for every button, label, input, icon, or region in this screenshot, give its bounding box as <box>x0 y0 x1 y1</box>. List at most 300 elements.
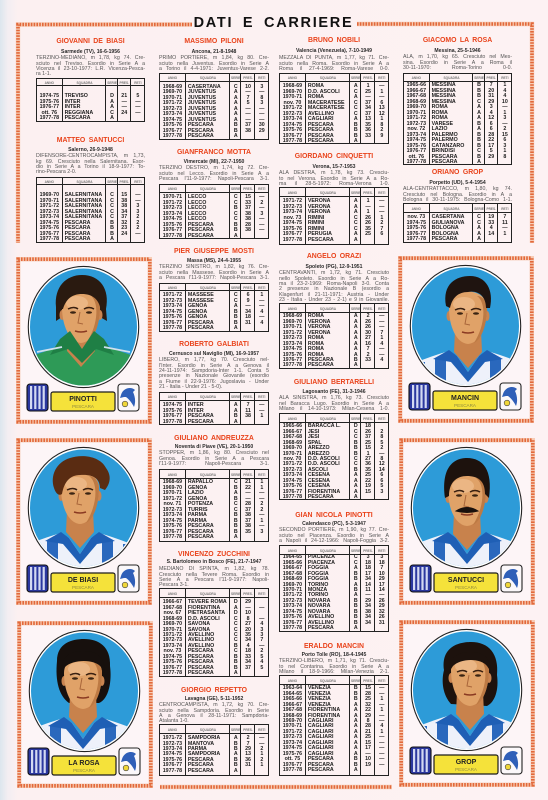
player: Eraldo Mancin: A <box>354 745 358 751</box>
player: Angelo Orazi: A <box>354 330 358 336</box>
player: Giorgio Repetto: Atalanta 1-0. <box>159 718 189 724</box>
player: Angelo Orazi: 7 <box>380 330 383 336</box>
player: Massimo Piloni: — <box>259 89 264 95</box>
team stripes <box>27 384 48 411</box>
player: Vincenzo Zucchini: 33 <box>245 654 251 660</box>
player: Giuliano Andreuzza: l'11-9-1977: Napoli-Pescara 3-1. <box>159 461 269 467</box>
player: Bruno Nobili: PESCARA <box>308 127 334 133</box>
player: Massimo Piloni: A <box>234 95 238 101</box>
player: Gian Nicola Pinotti: NOVARA <box>308 603 330 609</box>
player: Giovanni De Biasi: SQUADRA <box>76 81 93 85</box>
player: Oriano Grop: RETI <box>501 207 508 211</box>
player: Giorgio Repetto: B <box>234 741 238 747</box>
name plate <box>51 392 115 411</box>
player: Vincenzo Zucchini: 5 <box>260 654 263 660</box>
player: Giorgio Repetto: 2 <box>247 735 250 741</box>
player: Pier Giuseppe Mosti: 34 <box>245 309 251 315</box>
player: Giuliano Andreuzza: GENOA <box>188 485 207 491</box>
player: Giacomo La Rosa: C <box>477 99 481 105</box>
player: Eraldo Mancin: ANNO <box>288 679 297 683</box>
player: Bruno Nobili: — <box>365 94 371 100</box>
player: Giordano Cinquetti: PERUGIA <box>308 231 332 237</box>
player: Pier Giuseppe Mosti: C <box>234 292 238 298</box>
player: Giordano Cinquetti: GIORDANO CINQUETTI <box>295 153 373 160</box>
player: Eraldo Mancin: RETI <box>378 679 385 683</box>
player: Giuliano Andreuzza: 3 <box>260 529 263 535</box>
player: Giuliano Bertarelli: SQUADRA <box>320 417 336 421</box>
player: Vincenzo Zucchini: C <box>234 648 238 654</box>
player: Gian Nicola Pinotti: 1968-69 <box>283 576 302 582</box>
player: Massimo Piloni: PESCARA <box>188 133 214 139</box>
player: Giuliano Andreuzza: 28 <box>245 501 251 507</box>
player: Gianfranco Motta: B <box>234 222 238 228</box>
player: Giuliano Andreuzza: PARMA <box>188 512 207 518</box>
name plate: PESCARA <box>72 585 95 590</box>
player: Giacomo La Rosa: 1973-74 <box>407 132 426 138</box>
player: Giacomo La Rosa: 3 <box>490 104 493 110</box>
player: Gian Nicola Pinotti: — <box>379 592 384 598</box>
player: Giordano Cinquetti: — <box>379 204 384 210</box>
player: Angelo Orazi: SQUADRA <box>320 307 336 311</box>
player: Giuliano Bertarelli: 15 <box>365 489 371 495</box>
player: Bruno Nobili: BRUNO NOBILI <box>308 37 360 44</box>
player: Angelo Orazi: 27 <box>365 335 371 341</box>
player: Giuliano Bertarelli: 8 <box>380 456 383 462</box>
player: Giuliano Bertarelli: B <box>354 445 358 451</box>
player: Giacomo La Rosa: RETI <box>501 76 508 80</box>
player: Bruno Nobili: D.D. ASCOLI <box>308 89 340 95</box>
player: Vincenzo Zucchini: — <box>259 605 264 611</box>
player: Matteo Santucci: 2 <box>136 214 139 220</box>
player: Bruno Nobili: — <box>379 83 384 89</box>
player: Roberto Galbiati: SERIE <box>231 395 241 399</box>
player: Eraldo Mancin: 1969-70 <box>283 718 302 724</box>
player: Angelo Orazi: 33 <box>365 357 371 363</box>
player: Eraldo Mancin: 1967-68 <box>283 707 302 713</box>
player: Matteo Santucci: PESCARA <box>65 220 91 226</box>
player: Bruno Nobili: A <box>354 94 358 100</box>
player: Vincenzo Zucchini: PESCARA <box>188 665 214 671</box>
player: Gian Nicola Pinotti: 29 <box>365 598 371 604</box>
player: Pier Giuseppe Mosti: 4 <box>260 309 263 315</box>
player: Eraldo Mancin: 1973-74 <box>283 740 302 746</box>
player: Giordano Cinquetti: 1977-78 <box>283 237 302 243</box>
player: Giovanni De Biasi: PRES. <box>119 81 129 85</box>
player: Matteo Santucci: Salerno, 26-9-1948 <box>68 147 113 153</box>
player: Eraldo Mancin: — <box>379 756 384 762</box>
player: Gian Nicola Pinotti: PIACENZA <box>308 554 335 560</box>
player: Roberto Galbiati: INTER <box>188 402 204 408</box>
player: Matteo Santucci: PRES. <box>119 180 129 184</box>
player: Giovanni De Biasi: RETI <box>134 81 142 85</box>
player: Giacomo La Rosa: ROMA <box>432 104 448 110</box>
player: Matteo Santucci: 3 <box>136 203 139 209</box>
player: Eraldo Mancin: ERALDO MANCIN <box>304 643 364 650</box>
player: Giuliano Bertarelli: 37 <box>365 434 371 440</box>
player: Gianfranco Motta: — <box>259 222 264 228</box>
player: Gian Nicola Pinotti: sciuto nel Piacenza. Esordio in Serie A <box>279 533 389 539</box>
player: Pier Giuseppe Mosti: PESCARA <box>188 320 214 326</box>
sticker: Pinotti <box>16 257 152 424</box>
player: Giacomo La Rosa: ANNO <box>412 76 421 80</box>
player: Oriano Grop: SQUADRA <box>443 207 460 211</box>
player: Massimo Piloni: 3 <box>260 100 263 106</box>
player: Gian Nicola Pinotti: 3 <box>380 554 383 560</box>
photo: Pinotti <box>26 265 142 389</box>
player: Eraldo Mancin: CAGLIARI <box>308 729 333 735</box>
player: Roberto Galbiati: 1 <box>260 413 263 419</box>
player: Gian Nicola Pinotti: 17 <box>365 571 371 577</box>
player: Oriano Grop: ORIANO GROP <box>432 169 483 176</box>
player: Matteo Santucci: 1975-76 <box>40 225 59 231</box>
player: Giorgio Repetto: SAMPDORIA <box>188 751 220 757</box>
player: Eraldo Mancin: A <box>354 702 358 708</box>
player: Bruno Nobili: Roma il 27-4-1969: Roma-Varese 0-0. <box>279 66 389 72</box>
player: Giacomo La Rosa: A <box>477 110 481 116</box>
player: Angelo Orazi: PESCARA <box>308 362 334 368</box>
player: Angelo Orazi: 4 <box>380 341 383 347</box>
player: Giuliano Bertarelli: 26 <box>365 429 371 435</box>
player: Giuliano Andreuzza: 38 <box>245 512 251 518</box>
player: Gian Nicola Pinotti: 10 <box>379 571 385 577</box>
player: Gianfranco Motta: 3 <box>260 211 263 217</box>
player: Giuliano Andreuzza: SERIE <box>231 473 241 477</box>
player: Angelo Orazi: ROMA <box>308 341 324 347</box>
player: Massimo Piloni: 38 <box>245 128 251 134</box>
player: Giuliano Bertarelli: 18 <box>365 423 371 429</box>
player: Angelo Orazi: PRES. <box>363 307 373 311</box>
player: Vincenzo Zucchini: 37 <box>245 665 251 671</box>
player: Oriano Grop: 4 <box>490 225 493 231</box>
player: Giuliano Bertarelli: RETI <box>378 417 385 421</box>
player: Matteo Santucci: 1973-74 <box>40 214 59 220</box>
player: Oriano Grop: 33 <box>488 220 494 226</box>
player: Giuliano Bertarelli: PESCARA <box>308 494 334 500</box>
icon: dolphin club badge <box>501 565 522 592</box>
player: Angelo Orazi: CENTRAVANTI, m 1,72, kg 71. Cresciuto <box>279 270 389 276</box>
player: Giacomo La Rosa: 22 <box>488 137 494 143</box>
player: Bruno Nobili: 34 <box>365 105 371 111</box>
player: Angelo Orazi: A <box>354 313 358 319</box>
player: Gian Nicola Pinotti: AVELLINO <box>308 614 334 620</box>
player: Giuliano Andreuzza: 1973-74 <box>163 512 182 518</box>
player: Giovanni De Biasi: 1977-78 <box>40 115 59 121</box>
player: Eraldo Mancin: CAGLIARI <box>308 734 333 740</box>
player: Matteo Santucci: 1970-71 <box>40 198 59 204</box>
player: Massimo Piloni: 1974-75 <box>163 117 182 123</box>
player: Giuliano Bertarelli: D.D. ASCOLI <box>308 461 340 467</box>
player: Giuliano Bertarelli: A <box>354 478 358 484</box>
player: Oriano Grop: A <box>477 236 481 242</box>
player: Angelo Orazi: Klagenfurt il 21-11-1971: Austria - Under <box>279 292 389 298</box>
player: Giuliano Bertarelli: A <box>354 489 358 495</box>
player: Giorgio Repetto: MANTOVA <box>188 741 214 747</box>
player: Gianfranco Motta: 1977-78 <box>163 233 182 239</box>
player: Giordano Cinquetti: A <box>354 209 358 215</box>
player: Giacomo La Rosa: CATANZARO <box>432 143 464 149</box>
player: Giacomo La Rosa: B <box>477 154 481 160</box>
player: Massimo Piloni: PESCARA <box>188 128 214 134</box>
player: Vincenzo Zucchini: 1972-73 <box>163 637 182 643</box>
player: Giorgio Repetto: PARMA <box>188 746 207 752</box>
player: Vincenzo Zucchini: 4 <box>260 621 263 627</box>
player: Giacomo La Rosa: B <box>477 137 481 143</box>
player: Gian Nicola Pinotti: 34 <box>365 620 371 626</box>
player: Giuliano Bertarelli: 1969-70 <box>283 445 302 451</box>
player: Vincenzo Zucchini: 1973-74 <box>163 643 182 649</box>
player: Gian Nicola Pinotti: 1969-70 <box>283 582 302 588</box>
player: Gian Nicola Pinotti: 26 <box>379 598 385 604</box>
player: Matteo Santucci: DIFENSORE-CENTROCAMPISTA, m 1,73, <box>36 153 145 159</box>
player: Giordano Cinquetti: — <box>379 198 384 204</box>
player: Vincenzo Zucchini: 5 <box>260 665 263 671</box>
player: Pier Giuseppe Mosti: — <box>259 298 264 304</box>
player: Gianfranco Motta: PRES. <box>243 187 253 191</box>
player: Oriano Grop: C <box>477 220 481 226</box>
player: Gianfranco Motta: 2 <box>260 200 263 206</box>
player: Giuliano Andreuzza: RETI <box>258 473 265 477</box>
player: Eraldo Mancin: 10 <box>365 756 371 762</box>
player: Matteo Santucci: 15 <box>121 192 127 198</box>
player: Oriano Grop: 19 <box>488 214 494 220</box>
player: Massimo Piloni: A <box>234 117 238 123</box>
player: Angelo Orazi: ANGELO ORAZI <box>307 253 361 260</box>
player: Gianfranco Motta: PESCARA <box>188 222 214 228</box>
player: Giorgio Repetto: sciuto nella Sampdoria. Esordio in Serie <box>159 708 269 714</box>
player: Gianfranco Motta: — <box>259 227 264 233</box>
player: Gian Nicola Pinotti: AVELLINO <box>308 620 334 626</box>
player: Gianfranco Motta: 1974-75 <box>163 216 182 222</box>
player: Giuliano Andreuzza: 38 <box>245 523 251 529</box>
player: Vincenzo Zucchini: 8 <box>247 616 250 622</box>
player: Bruno Nobili: AVELLINO <box>308 111 334 117</box>
player: Gianfranco Motta: RETI <box>258 187 265 191</box>
player: Giordano Cinquetti: — <box>365 204 371 210</box>
icon: dolphin club badge <box>119 748 140 775</box>
player: Roberto Galbiati: SQUADRA <box>200 395 216 399</box>
player: Gian Nicola Pinotti: A <box>354 592 358 598</box>
player: Giorgio Repetto: A a Genova il 28-11-1971: Sampdoria- <box>159 713 269 719</box>
player: Bruno Nobili: PRES. <box>363 76 373 80</box>
player: Giuliano Bertarelli: 1974-75 <box>283 478 302 484</box>
player: Giuliano Andreuzza: STOPPER, m 1,86, kg 80. Cresciuto nel <box>159 450 269 456</box>
player: Massimo Piloni: — <box>259 111 264 117</box>
player: Bruno Nobili: A <box>354 138 358 144</box>
player: Eraldo Mancin: 22 <box>365 707 371 713</box>
player: Bruno Nobili: 1974-75 <box>283 122 302 128</box>
player: Giuliano Bertarelli: B <box>354 440 358 446</box>
player: Vincenzo Zucchini <box>159 551 269 677</box>
player: Matteo Santucci: kg 69. Cresciuto nella Salernitana. Esor- <box>36 159 145 165</box>
player: Giuliano Bertarelli: Milano il 14-10-1973: Milan-Cesena 1-0. <box>279 406 389 412</box>
player: Massimo Piloni: Ancona, 21-8-1948 <box>192 49 236 55</box>
player: Angelo Orazi: 1970-71 <box>283 324 302 330</box>
player: Oriano Grop: 7 <box>503 214 506 220</box>
player: Gian Nicola Pinotti: FOGGIA <box>308 576 329 582</box>
player: Giuliano Andreuzza: nov. 71 <box>163 501 181 507</box>
player: Angelo Orazi: 2 presenze in Nazionale B (esordio a <box>279 286 389 292</box>
player: Eraldo Mancin: 1963-64 <box>283 685 302 691</box>
player: Giacomo La Rosa: 6 <box>490 126 493 132</box>
name plate: PESCARA <box>72 404 95 409</box>
player: Massimo Piloni: 3 <box>260 84 263 90</box>
player: Gianfranco Motta: GIANFRANCO MOTTA <box>177 149 251 156</box>
player: Vincenzo Zucchini: SQUADRA <box>200 592 216 596</box>
player: Oriano Grop: A <box>477 231 481 237</box>
player: Oriano Grop: GIULIANOVA <box>432 220 464 226</box>
player: Eraldo Mancin: 1965-66 <box>283 696 302 702</box>
player: Giuliano Andreuzza: SQUADRA <box>200 473 216 477</box>
player: Vincenzo Zucchini: C <box>234 621 238 627</box>
player: Matteo Santucci <box>36 137 145 243</box>
player: Massimo Piloni: 8 <box>260 95 263 101</box>
player: Giuliano Andreuzza: 2 <box>260 507 263 513</box>
player: Massimo Piloni: 5 <box>247 100 250 106</box>
player: Eraldo Mancin: — <box>365 751 371 757</box>
player: Vincenzo Zucchini: nov. 67 <box>163 610 181 616</box>
player: Eraldo Mancin: to nel Contarina. Esordio in Serie A a <box>279 664 389 670</box>
player: Giuliano Bertarelli: 25 <box>365 472 371 478</box>
player: Giacomo La Rosa: MESSINA <box>432 99 456 105</box>
player: Bruno Nobili: Valencia (Venezuela), 7-10-1949 <box>296 48 372 54</box>
player: Giuliano Bertarelli: ASCOLI <box>308 467 328 473</box>
player: Giacomo La Rosa: B <box>477 121 481 127</box>
player: Giacomo La Rosa: PALERMO <box>432 137 458 143</box>
player: Vincenzo Zucchini: — <box>259 643 264 649</box>
player: Eraldo Mancin: FIORENTINA <box>308 707 340 713</box>
player: Giuliano Bertarelli: A <box>354 483 358 489</box>
player: Giovanni De Biasi: INTER <box>65 99 81 105</box>
player: Angelo Orazi: 1975-76 <box>283 352 302 358</box>
player: Gian Nicola Pinotti: 1970-71 <box>283 587 302 593</box>
player: Bruno Nobili: PESCARA <box>308 122 334 128</box>
player: Giacomo La Rosa: 6 <box>490 121 493 127</box>
player: Giuliano Bertarelli: 1 <box>367 451 370 457</box>
player: Eraldo Mancin: VENEZIA <box>308 691 331 697</box>
player: Roberto Galbiati: A <box>234 402 238 408</box>
player: Eraldo Mancin: 1 <box>380 729 383 735</box>
player: Gian Nicola Pinotti: 3 <box>367 554 370 560</box>
player: Pier Giuseppe Mosti: PIER GIUSEPPE MOSTI <box>174 248 254 255</box>
player: Giordano Cinquetti: VERONA <box>308 204 330 210</box>
player: Giuliano Andreuzza: PESCARA <box>188 534 214 540</box>
player: Roberto Galbiati: RETI <box>258 395 265 399</box>
player: Giacomo La Rosa: 1977-78 <box>407 159 426 165</box>
player: Pier Giuseppe Mosti: — <box>259 314 264 320</box>
player: Gian Nicola Pinotti: PIACENZA <box>308 560 335 566</box>
player: Oriano Grop: Bologna il 30-11-1975: Bologna-Como 1-1. <box>403 197 512 203</box>
player: Giovanni De Biasi: GIOVANNI DE BIASI <box>56 38 125 45</box>
player: Vincenzo Zucchini: TEVERE ROMA <box>188 599 227 605</box>
player: Roberto Galbiati: 11 <box>245 408 251 414</box>
player: Eraldo Mancin: 28 <box>365 691 371 697</box>
player: Gian Nicola Pinotti: 7 <box>380 565 383 571</box>
player: Matteo Santucci: 37 <box>121 214 127 220</box>
player: Giuliano Andreuzza: 1969-70 <box>163 485 182 491</box>
player: Giuliano Bertarelli: FIORENTINA <box>308 489 340 495</box>
player: Pier Giuseppe Mosti: TERZINO SINISTRO, m 1,82, kg 76. Cre- <box>159 264 269 270</box>
player: Giuliano Andreuzza: B <box>234 529 238 535</box>
player: Massimo Piloni: 1975-76 <box>163 122 182 128</box>
player: Vincenzo Zucchini: A <box>234 670 238 676</box>
player: Giovanni De Biasi: INTER <box>65 104 81 110</box>
player: Angelo Orazi: 1969-70 <box>283 319 302 325</box>
player: Roberto Galbiati: 7 <box>247 402 250 408</box>
name plate: PESCARA <box>73 768 96 773</box>
player: Giacomo La Rosa: 17 <box>488 143 494 149</box>
player: Gian Nicola Pinotti: A <box>354 565 358 571</box>
player: Giacomo La Rosa: nov. 72 <box>407 126 425 132</box>
player: Giacomo La Rosa: MESSINA <box>432 88 456 94</box>
player: Giuliano Bertarelli: nel Baracca Lugo. Esordio in Serie A a <box>279 401 389 407</box>
player: Matteo Santucci: SALERNITANA <box>65 198 102 204</box>
player: Giovanni De Biasi: PESCARA <box>65 115 91 121</box>
player: Oriano Grop: 1977-78 <box>407 236 426 242</box>
player: Massimo Piloni: — <box>245 117 251 123</box>
player: Giuliano Andreuzza: 1975-76 <box>163 523 182 529</box>
name plate: PESCARA <box>455 585 478 590</box>
player: Gianfranco Motta: Vimercate (MI), 22-7-1950 <box>184 159 244 165</box>
player: Giacomo La Rosa: 1975-76 <box>407 143 426 149</box>
player: Giacomo La Rosa: BRINDISI <box>432 148 455 154</box>
player: Giacomo La Rosa: ALA, m 1,70, kg 65. Cresciuto nel Mes- <box>403 54 512 60</box>
player: Oriano Grop: BOLOGNA <box>432 231 459 237</box>
player: Massimo Piloni: 10 <box>245 84 251 90</box>
player: Bruno Nobili: 1971-72 <box>283 105 302 111</box>
player: Massimo Piloni: MASSIMO PILONI <box>184 38 244 45</box>
player: Vincenzo Zucchini: C <box>234 637 238 643</box>
player: Angelo Orazi: ROMA <box>308 335 324 341</box>
player: Giordano Cinquetti: 6 <box>380 231 383 237</box>
player: Vincenzo Zucchini: 20 <box>245 627 251 633</box>
player: Vincenzo Zucchini: MEDIANO DI SPINTA, m 1,82, kg 78. <box>159 566 269 572</box>
player: Giuliano Andreuzza: 1 <box>260 518 263 524</box>
player: Giordano Cinquetti: SERIE <box>351 191 361 195</box>
player: Oriano Grop: PRES. <box>486 207 496 211</box>
player: Bruno Nobili: 25 <box>365 89 371 95</box>
player: Giorgio Repetto: 1975-76 <box>163 757 182 763</box>
player: Vincenzo Zucchini: D <box>234 610 238 616</box>
player: Matteo Santucci: 1977-78 <box>40 236 59 242</box>
player: Giorgio Repetto: 1971-72 <box>163 735 182 741</box>
player: Pier Giuseppe Mosti: sciuto nella Massese. Esordio in Serie A <box>159 270 269 276</box>
player: Giuliano Andreuzza: GIULIANO ANDREUZZA <box>174 435 254 442</box>
player: Bruno Nobili: 1 <box>380 89 383 95</box>
player: Giuliano Bertarelli: CESENA <box>308 478 330 484</box>
player: Giuliano Bertarelli: 6 <box>380 478 383 484</box>
player: Giacomo La Rosa: 7 <box>490 82 493 88</box>
player: Vincenzo Zucchini: B <box>234 643 238 649</box>
player: Angelo Orazi: 26 <box>365 324 371 330</box>
player: Giuliano Bertarelli: D.D. ASCOLI <box>308 456 340 462</box>
player: Giacomo La Rosa: 29 <box>488 154 494 160</box>
player: Angelo Orazi: nello Spoleto. Esordio in Serie A a Ro- <box>279 276 389 282</box>
player: Roberto Galbiati: PRES. <box>243 395 253 399</box>
player: Pier Giuseppe Mosti: 1972-73 <box>163 298 182 304</box>
player: Matteo Santucci: RETI <box>134 180 142 184</box>
player: Bruno Nobili: A <box>354 83 358 89</box>
player: Massimo Piloni: PRIMO PORTIERE, m 1,84, kg 80. Cre- <box>159 55 269 61</box>
player: Gianfranco Motta: — <box>259 194 264 200</box>
player: Giuliano Bertarelli: 5 <box>380 483 383 489</box>
player: Giordano Cinquetti: RIMINI <box>308 220 324 226</box>
player: Giacomo La Rosa: C <box>477 148 481 154</box>
player: Massimo Piloni: A <box>234 133 238 139</box>
player: Giuliano Bertarelli: AREZZO <box>308 445 330 451</box>
player: Matteo Santucci: SERIE <box>107 180 117 184</box>
player: Eraldo Mancin: — <box>379 718 384 724</box>
player: Gianfranco Motta: LECCO <box>188 200 206 206</box>
